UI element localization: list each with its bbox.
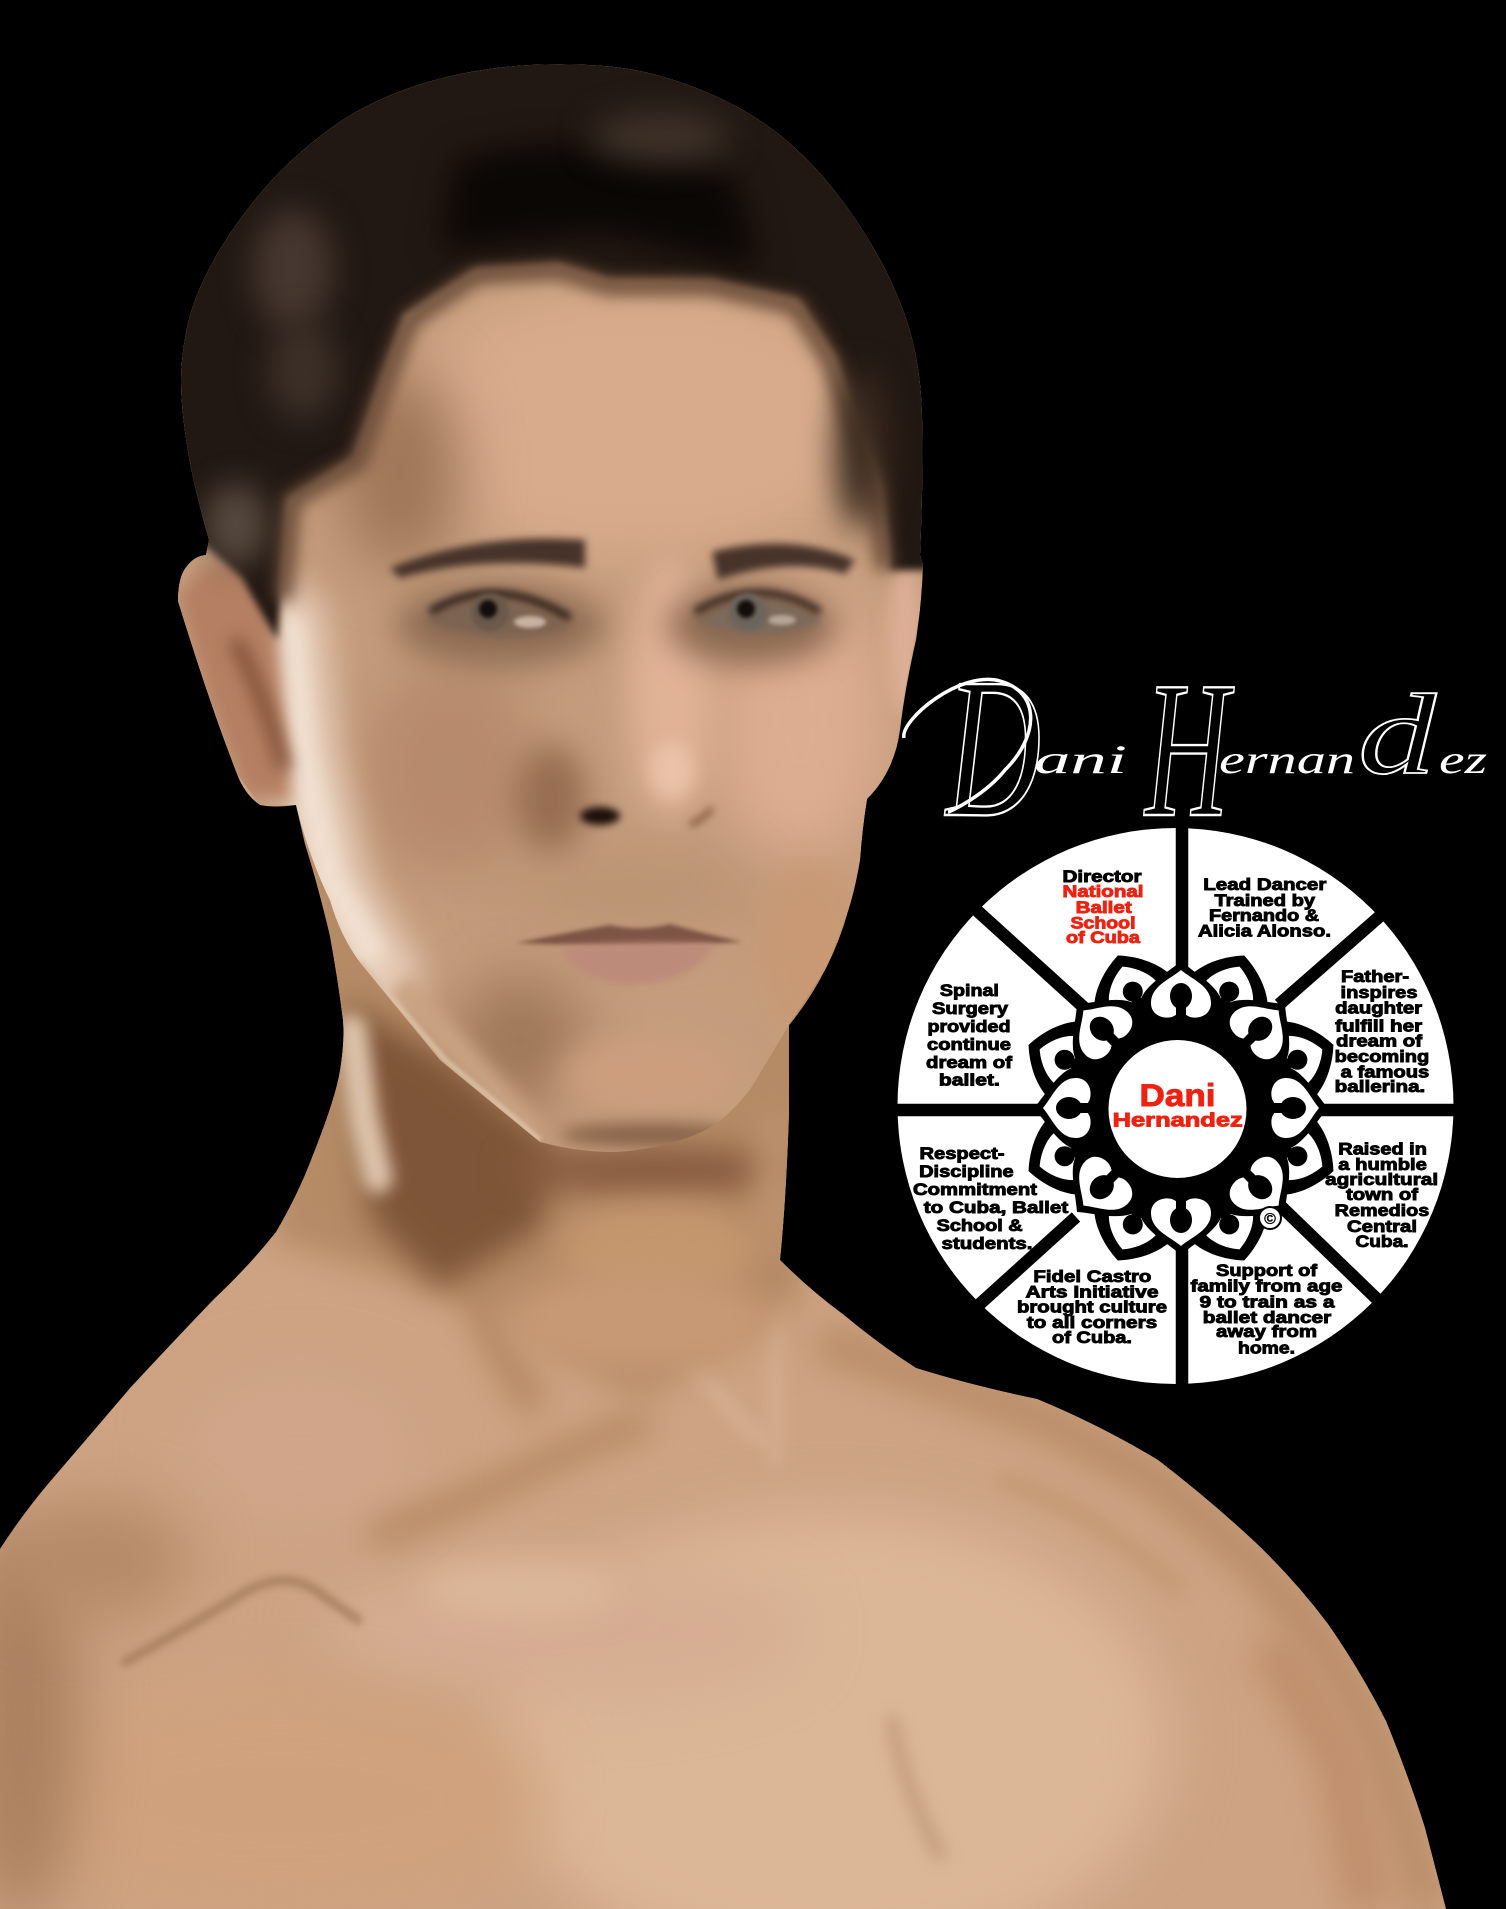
segment: Father: becoming [1335,1048,1429,1066]
eyes [425,601,570,638]
segment: Father: a famous [1341,1064,1429,1082]
centre circle with name: Dani [1140,1077,1216,1113]
segment: Father: ballerina. [1335,1078,1425,1096]
segment: Spinal Surgery: provided [928,1018,1010,1036]
segment: Respect [913,1145,1069,1253]
centre circle with name [1108,1040,1246,1178]
segment: Fidel Castro: of Cuba. [1052,1329,1132,1347]
face [150,40,950,1160]
segment: Director: of Cuba [1066,929,1141,947]
hair [181,64,923,642]
segment: Director: Ballet [1076,899,1132,917]
segment: Director: School [1070,914,1136,932]
segment: Respect: students. [942,1235,1032,1253]
segment: Fidel Castro: brought culture [1017,1299,1167,1317]
segment: Father: Father- [1341,968,1409,986]
segment: Respect: to Cuba, Ballet [924,1199,1069,1217]
mandala [1011,938,1351,1278]
segment: Support: Support of [1216,1262,1318,1280]
segment: Raised [1325,1141,1438,1251]
segment: Father: inspires [1340,984,1418,1002]
segment: Director: National [1062,883,1144,901]
segment: Lead Dancer: Lead Dancer [1203,876,1327,894]
segment: Raised: town of [1346,1186,1419,1204]
signature: Dani Hernandez [904,638,1488,859]
circular diagram [880,800,1480,1400]
segment: Respect: Commitment [913,1181,1038,1199]
segment: Fidel Castro: to all corners [1027,1314,1157,1332]
segment: Director: Director [1062,868,1142,886]
neck [270,800,860,1400]
segment: Support [1190,1262,1342,1358]
nose [580,807,620,825]
segment: Raised: Raised in [1338,1141,1427,1159]
copyright mark: © [1264,1211,1276,1228]
centre circle with name: Hernandez [1113,1110,1243,1132]
spokes [880,800,1480,1400]
segment: Father [1335,968,1429,1096]
clavicle creases [125,1270,940,1855]
segment: Raised: Central [1347,1218,1417,1236]
white disc [898,828,1454,1384]
ears [178,560,290,800]
segment: Father: fulfill her [1335,1017,1423,1035]
torso shading [0,1340,1430,1909]
segment: Support: 9 to train as a [1200,1294,1336,1312]
segment: Director [1062,868,1144,947]
segment: Lead Dancer [1198,876,1331,940]
segment: Spinal Surgery: continue [927,1036,1011,1054]
segment: Raised: agricultural [1325,1171,1438,1189]
segment: Respect: Discipline [919,1163,1014,1181]
segment: Lead Dancer: Trained by [1214,892,1316,910]
signature: Dani Hernandez: H [1143,642,1234,858]
segment: Support: family from age [1190,1277,1342,1295]
segment: Spinal Surgery: dream of [926,1054,1013,1072]
signature: Dani Hernandez: d [1358,671,1437,798]
segment: Respect: School & [937,1217,1023,1235]
segment: Support: home. [1238,1340,1295,1358]
segment: Fidel Castro: Fidel Castro [1033,1268,1151,1286]
signature: Dani Hernandez: ernan [1219,737,1355,782]
segment: Raised: Remedios [1335,1202,1429,1220]
signature: Dani Hernandez: ani [1034,737,1127,782]
segment: Lead Dancer: Fernando & [1209,907,1319,925]
segment: Fidel Castro [1017,1268,1167,1347]
mouth [516,924,742,945]
copyright mark [1259,1207,1281,1229]
left cheek highlight [290,620,385,975]
segment: Spinal Surgery: Surgery [932,1000,1009,1018]
segment: Spinal Surgery: Spinal [940,982,999,1000]
signature: Dani Hernandez: ez [1439,737,1488,782]
segment: Support: ballet dancer [1203,1309,1332,1327]
segment: Fidel Castro: Arts Initiative [1026,1284,1158,1302]
segment: Father: daughter [1335,1000,1423,1018]
segment: Raised: a humble [1338,1156,1427,1174]
segment: Lead Dancer: Alicia Alonso. [1198,922,1331,940]
segment: Spinal Surgery [926,982,1013,1090]
segment: Support: away from [1216,1323,1317,1341]
segment: Respect: Respect- [920,1145,1004,1163]
segment: Spinal Surgery: ballet. [939,1072,1000,1090]
segment: Raised: Cuba. [1356,1233,1408,1251]
signature: Dani Hernandez: D [944,638,1041,859]
segment: Father: dream of [1336,1032,1423,1050]
eyebrows [390,539,585,578]
